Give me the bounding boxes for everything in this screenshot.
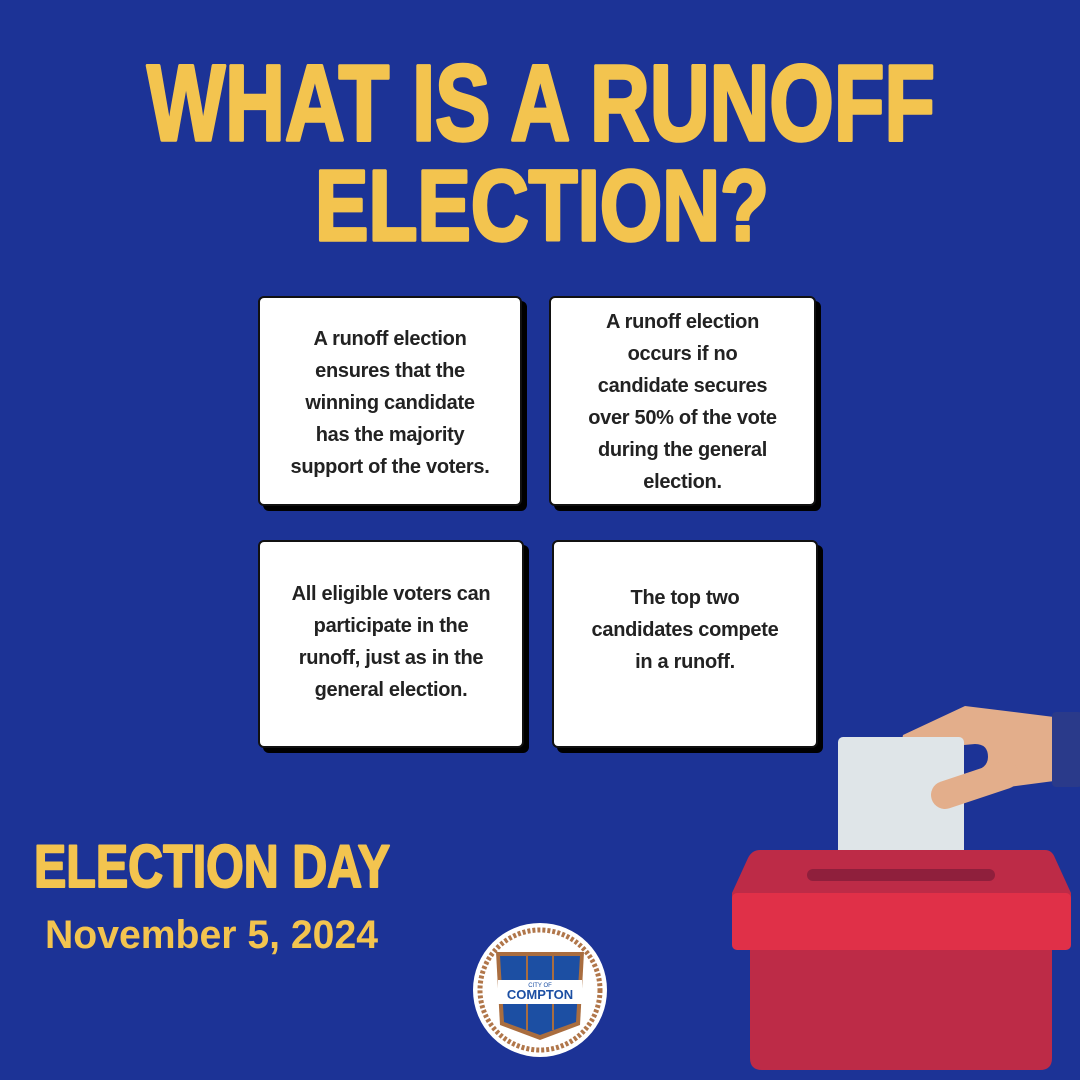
card 2: over 50% of the vote [588, 407, 777, 429]
card 2: candidate secures [598, 375, 767, 397]
card 4: in a runoff. [635, 651, 735, 673]
card 3: runoff, just as in the [299, 647, 483, 669]
card 1: winning candidate [305, 392, 475, 414]
hand [900, 706, 1054, 800]
card 1: support of the voters. [291, 456, 489, 478]
card 3 [258, 540, 524, 748]
card 3: general election. [315, 679, 467, 701]
card 2: occurs if no [628, 343, 737, 365]
finger gap [964, 744, 988, 774]
ballot [838, 737, 964, 872]
card 2: A runoff election [606, 311, 759, 333]
card 4: The top two [631, 587, 739, 609]
card 1: A runoff election [313, 328, 467, 350]
card 2: during the general [598, 439, 767, 461]
election day text [34, 833, 390, 957]
city seal: COMPTON [507, 987, 573, 1002]
title [146, 42, 935, 260]
card 4 [552, 540, 818, 748]
card 2 [549, 296, 816, 506]
card 3: participate in the [314, 615, 468, 637]
card 1: has the majority [316, 424, 464, 446]
card 3: All eligible voters can [292, 583, 490, 605]
thumb [945, 775, 1005, 795]
card 1: ensures that the [315, 360, 465, 382]
card 1 [258, 296, 522, 506]
card 4: candidates compete [592, 619, 778, 641]
title: ELECTION? [315, 150, 769, 260]
box [732, 850, 1071, 900]
card 2: election. [643, 471, 722, 493]
city seal: CITY OF [528, 983, 552, 989]
election day text: November 5, 2024 [45, 913, 379, 957]
